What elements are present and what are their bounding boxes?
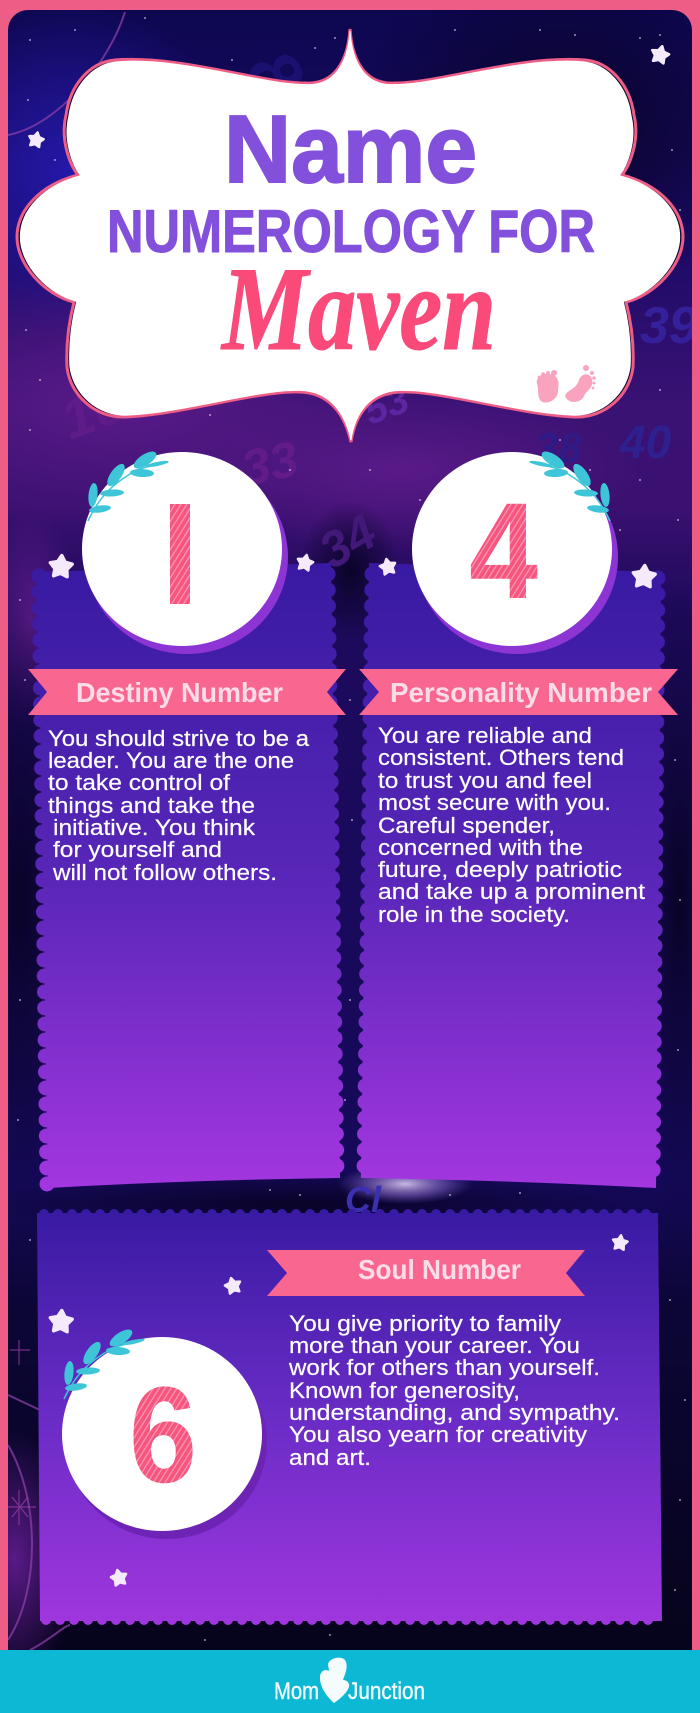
panel: soul number [37, 1213, 662, 1621]
number badge: 6 [62, 1326, 267, 1539]
ribbon: soul number: Soul Number [358, 1254, 521, 1285]
text: destiny description [48, 726, 310, 885]
faint floating numbers: Cl [345, 1179, 382, 1220]
text: personality description: to trust you and feel [378, 768, 592, 793]
number badge: 1 [82, 448, 288, 654]
icon: baby feet [537, 365, 596, 403]
title plaque [17, 29, 683, 442]
logo: MomJunction: Junction [348, 1678, 425, 1705]
title: numerology for: NUMEROLOGY FOR [107, 198, 595, 265]
faint floating numbers: 38 [535, 424, 582, 471]
text: destiny description: initiative. You think [53, 815, 256, 840]
text: personality description: future, deeply patriotic [378, 857, 622, 882]
text: soul description: You also yearn for creativity [289, 1422, 587, 1447]
title: Name: Name [224, 96, 477, 203]
logo: MomJunction [274, 1658, 425, 1705]
text: personality description: consistent. Others tend [378, 745, 624, 770]
text: destiny description: You should strive to be a [48, 726, 310, 751]
footer bar [0, 1650, 700, 1713]
text: personality description: role in the society. [378, 902, 570, 927]
text: personality description [378, 723, 645, 927]
text: soul description: more than your career. You [289, 1333, 580, 1358]
faint floating numbers [53, 37, 698, 1220]
ribbon: personality number: Personality Number [390, 677, 652, 708]
text: destiny description: things and take the [48, 793, 255, 818]
text: soul description: and art. [289, 1445, 371, 1470]
number badge: 1: 1 [142, 481, 218, 634]
ribbon: destiny number [28, 669, 346, 715]
faint floating numbers: 33 [237, 430, 303, 497]
faint floating numbers: 39 [640, 297, 698, 355]
panel: destiny number [28, 563, 346, 1188]
text: soul description: understanding, and sympathy. [289, 1400, 620, 1425]
text: destiny description: leader. You are the one [48, 748, 294, 773]
text: personality description: You are reliable and [378, 723, 592, 748]
text: soul description [288, 1311, 620, 1470]
number badge: 6: 6 [129, 1359, 197, 1512]
text: soul description: work for others than yourself. [288, 1355, 600, 1380]
faint floating numbers: 34 [310, 503, 386, 580]
text: destiny description: to take control of [48, 770, 231, 795]
faint arcs [8, 12, 125, 1650]
faint floating numbers: 10 [53, 371, 133, 451]
panel: personality number [359, 563, 678, 1188]
ribbon: personality number [359, 669, 678, 715]
text: personality description: concerned with the [378, 835, 583, 860]
text: soul description: Known for generosity, [289, 1378, 520, 1403]
text: personality description: Careful spender, [378, 813, 555, 838]
logo: MomJunction: Mom [274, 1678, 319, 1705]
text: destiny description: will not follow others. [52, 860, 277, 885]
star glints [8, 1340, 36, 1525]
faint floating numbers: 40 [619, 416, 672, 468]
text: soul description: You give priority to family [289, 1311, 561, 1336]
ribbon: destiny number: Destiny Number [76, 677, 283, 708]
faint floating numbers: 53 [358, 377, 415, 433]
text: personality description: most secure with you. [378, 790, 611, 815]
number badge: 4: 4 [469, 475, 538, 628]
title: Maven: Maven [220, 242, 496, 375]
text: personality description: and take up a prominent [378, 879, 645, 904]
text: destiny description: for yourself and [53, 837, 222, 862]
ribbon: soul number [267, 1250, 585, 1296]
number badge: 4 [412, 448, 618, 654]
faint floating numbers: 83 [232, 37, 340, 144]
